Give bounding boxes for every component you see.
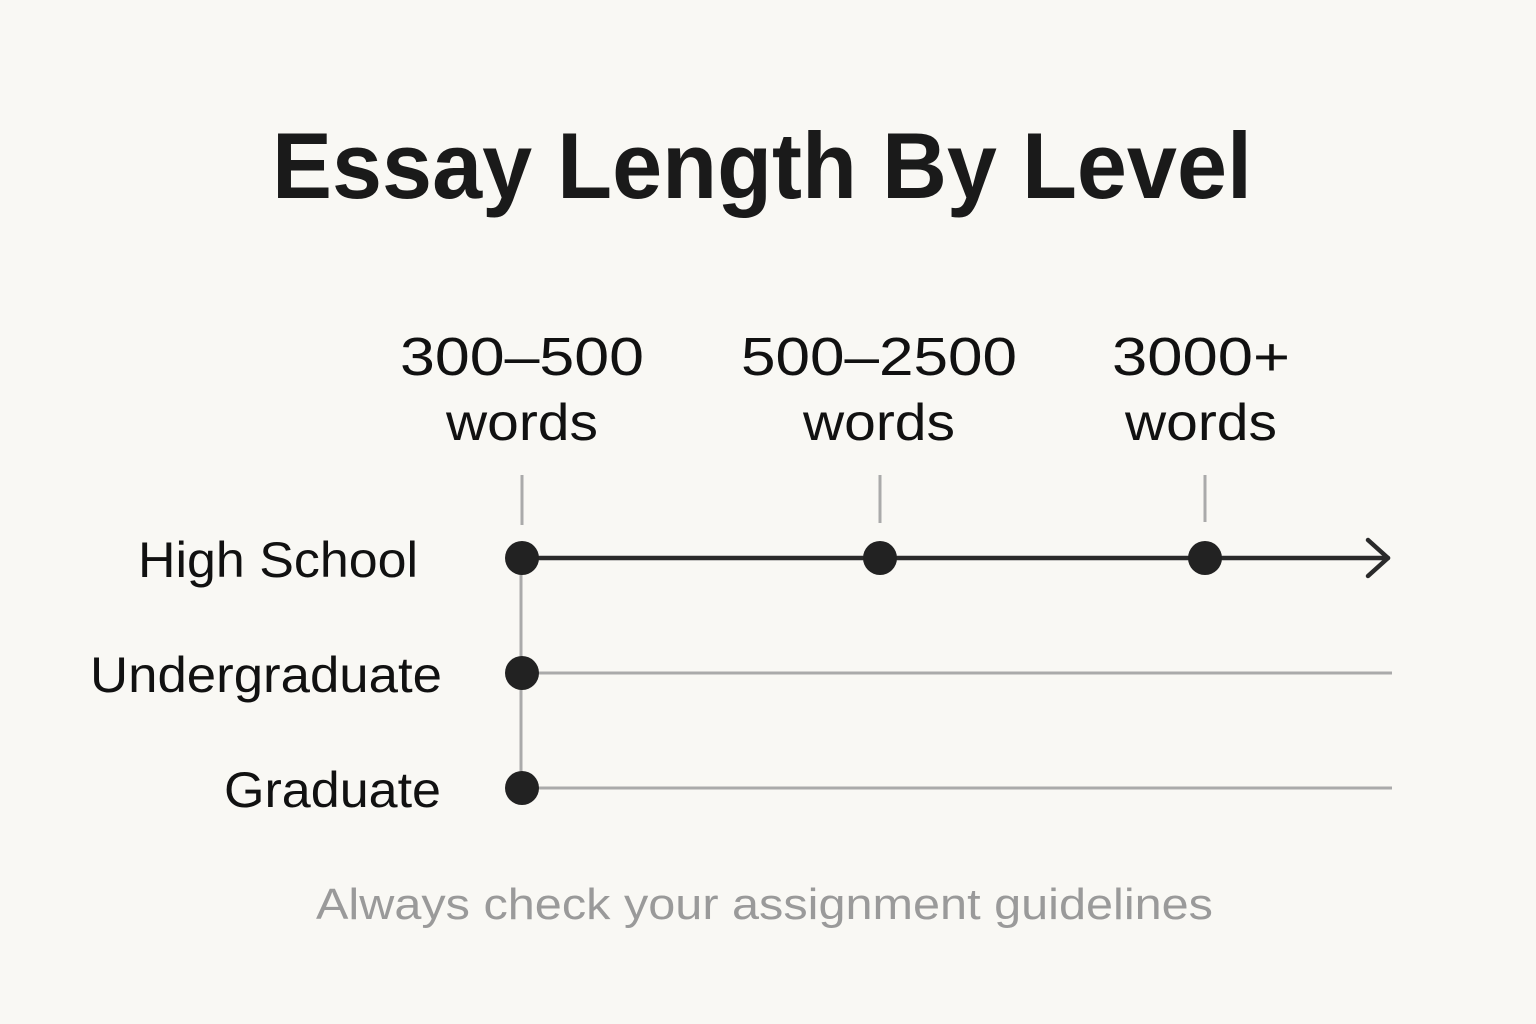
row label: Undergraduate: Undergraduate xyxy=(90,647,442,703)
range label: 300-500 words: 300–500 xyxy=(400,327,644,387)
range label: 3000+ words: words xyxy=(1124,394,1277,452)
tick marks xyxy=(522,475,1205,525)
arrow: high school timeline xyxy=(522,540,1388,576)
range label: 3000+ words: 3000+ xyxy=(1112,327,1290,387)
range label: 500-2500 words: words xyxy=(802,394,955,452)
range label: 300-500 words xyxy=(400,327,644,452)
gray row lines xyxy=(522,673,1392,788)
range label: 300-500 words: words xyxy=(445,394,598,452)
footer note: Always check your assignment guidelines xyxy=(316,880,1213,929)
range label: 500-2500 words xyxy=(741,327,1017,452)
title: Essay Length By Level xyxy=(272,113,1252,218)
dots xyxy=(505,541,1222,805)
range label: 3000+ words xyxy=(1112,327,1290,452)
row label: High School: High School xyxy=(138,532,418,588)
vertical connector xyxy=(520,558,522,788)
row label: Graduate: Graduate xyxy=(224,762,441,818)
range label: 500-2500 words: 500–2500 xyxy=(741,327,1017,387)
